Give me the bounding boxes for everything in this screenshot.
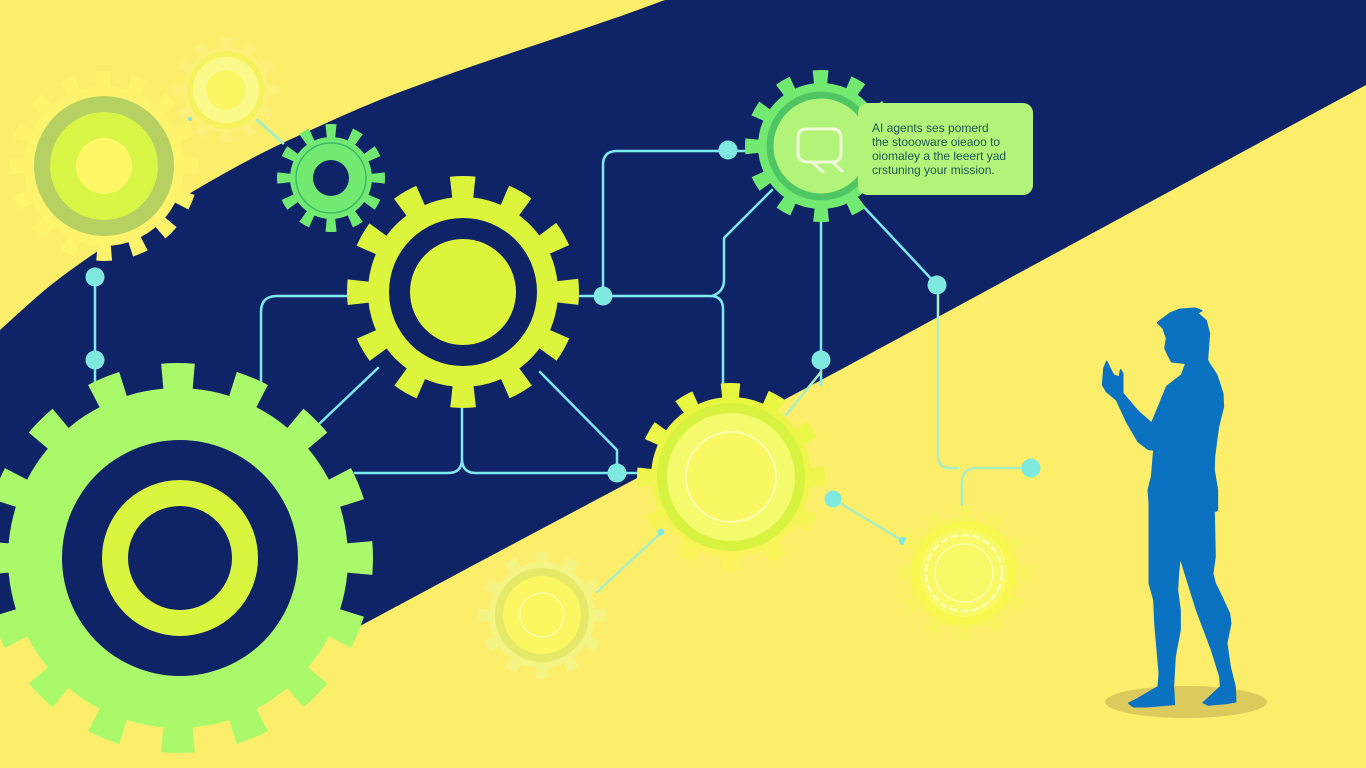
- person shadow: [1105, 686, 1267, 718]
- connector lines on navy: [95, 151, 937, 473]
- gear: lime centre: [359, 188, 567, 396]
- gear: small green: [284, 131, 378, 225]
- person silhouette: [1103, 308, 1236, 707]
- callout panel: the stoooware oieaoo to: [872, 135, 1000, 149]
- callout panel: AI agents ses pomerd: [872, 121, 989, 135]
- gear: top green with speech bubble: [753, 78, 889, 214]
- icon: speech bubble: [798, 129, 842, 172]
- callout panel: [858, 103, 1033, 195]
- gear: faint top: [180, 44, 272, 136]
- gear: top-left yellow: [19, 81, 189, 251]
- gear: centre glowing: [646, 392, 816, 562]
- callout panel: crstuning your mission.: [872, 163, 995, 177]
- connector nodes: [86, 112, 1040, 545]
- gear: right faint: [904, 513, 1024, 633]
- gear: large light green: [0, 378, 358, 738]
- gear: bottom faint: [485, 558, 599, 672]
- callout panel: oiomaley a the leeert yad: [872, 149, 1006, 163]
- connector lines on yellow: [255, 118, 1030, 592]
